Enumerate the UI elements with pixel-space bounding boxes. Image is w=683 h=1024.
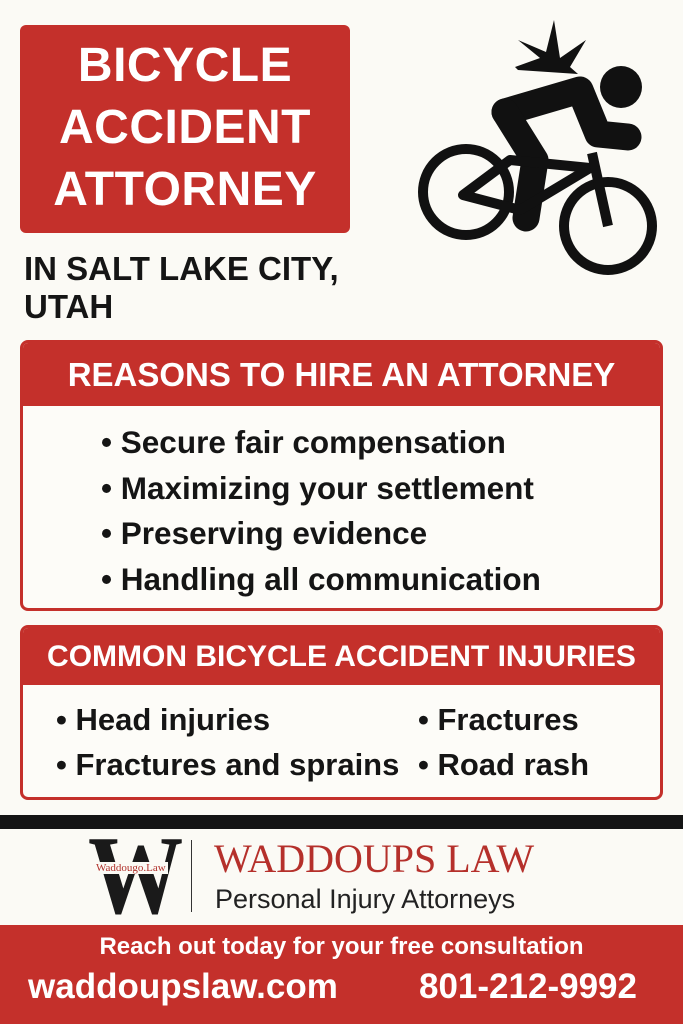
list: reasons: • Secure fair compensation bbox=[101, 424, 506, 460]
title box bbox=[20, 25, 350, 233]
title box: BICYCLE bbox=[78, 39, 292, 92]
list: reasons: • Maximizing your settlement bbox=[101, 470, 534, 506]
panel: reasons bbox=[20, 340, 663, 611]
list: reasons: • Preserving evidence bbox=[101, 515, 427, 551]
logo: W bbox=[88, 814, 183, 938]
subtitle bbox=[24, 250, 339, 325]
subtitle: IN SALT LAKE CITY, bbox=[24, 250, 339, 287]
panel: injuries bbox=[20, 625, 663, 800]
heading: reasons: REASONS TO HIRE AN ATTORNEY bbox=[68, 356, 615, 393]
list: reasons: • Handling all communication bbox=[101, 560, 541, 596]
heading: injuries: COMMON BICYCLE ACCIDENT INJURIES bbox=[47, 640, 636, 673]
divider bar bbox=[0, 815, 683, 829]
list: injuries: • Fractures bbox=[418, 702, 579, 737]
heading: injuries bbox=[23, 628, 660, 685]
footer: contact: waddoupslaw.com bbox=[28, 967, 338, 1006]
title box: ACCIDENT bbox=[59, 101, 311, 154]
brand name: WADDOUPS LAW bbox=[214, 836, 534, 881]
list: injuries: • Fractures and sprains bbox=[56, 747, 399, 782]
heading: reasons bbox=[23, 343, 660, 406]
list: injuries: • Road rash bbox=[418, 747, 589, 782]
list: reasons bbox=[101, 424, 541, 596]
list: injuries: • Head injuries bbox=[56, 702, 270, 737]
subtitle: UTAH bbox=[24, 288, 113, 325]
logo: Waddougo.Law bbox=[96, 862, 166, 874]
tagline: Personal Injury Attorneys bbox=[215, 884, 515, 914]
footer: contact bbox=[0, 925, 683, 1024]
footer: contact: 801-212-9992 bbox=[419, 967, 637, 1006]
list: injuries bbox=[56, 702, 589, 782]
footer: contact: Reach out today for your free consultation bbox=[99, 933, 584, 960]
icon: cyclist crash bbox=[418, 20, 657, 275]
title box: ATTORNEY bbox=[53, 163, 317, 216]
